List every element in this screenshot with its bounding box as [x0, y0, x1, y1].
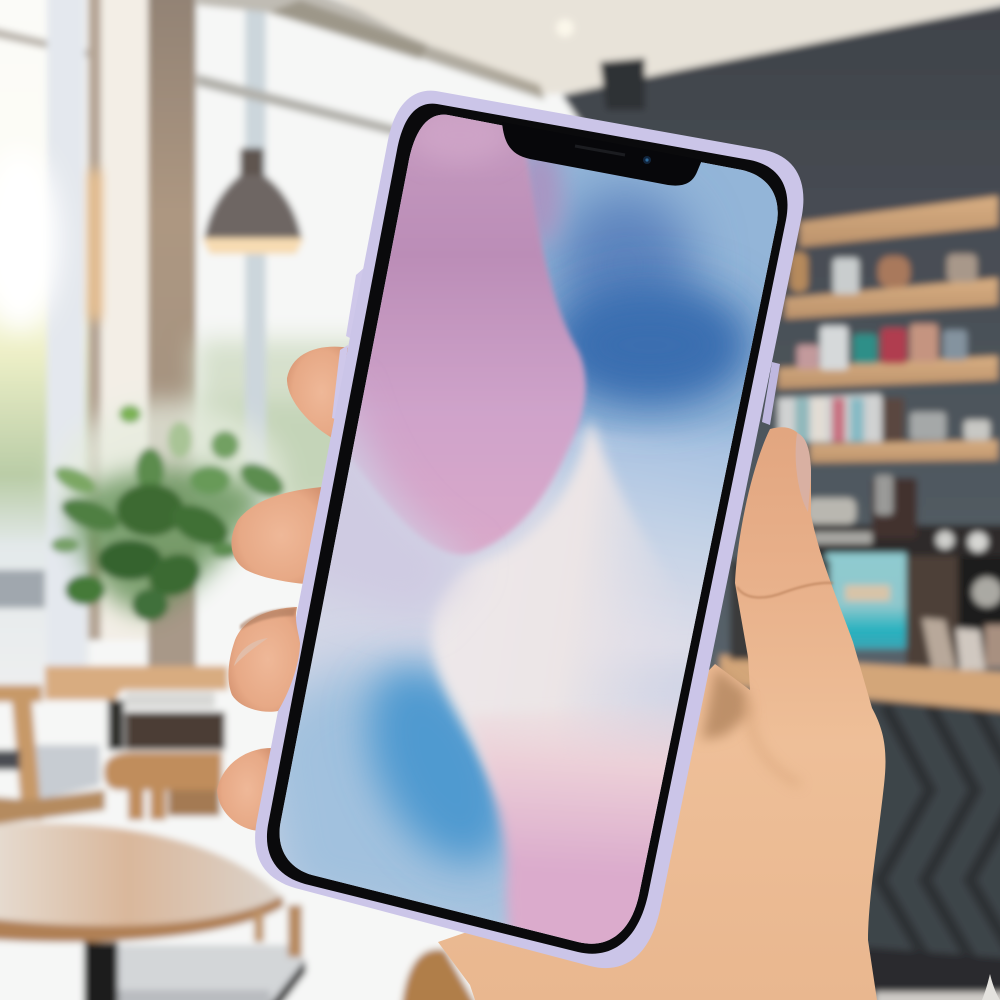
nail highlight — [234, 638, 268, 666]
pendant lamp — [202, 148, 304, 254]
car in window — [0, 570, 45, 608]
ceiling — [265, 0, 1000, 95]
cups — [922, 618, 956, 668]
speaker — [575, 146, 625, 155]
middle chair — [104, 752, 222, 820]
thumbnail — [796, 433, 811, 512]
deep blue area — [557, 190, 693, 340]
hand: palm and thumb — [438, 427, 886, 1000]
right window mullion — [245, 0, 266, 520]
right window green — [197, 340, 400, 520]
dark back wall — [562, 0, 1000, 1000]
front chair — [118, 905, 306, 1000]
screen wallpaper — [280, 114, 778, 944]
lower zigzag panel — [840, 700, 1000, 1000]
mid right fade — [552, 423, 736, 672]
black bezel — [267, 104, 788, 954]
finger top shadow — [240, 608, 296, 630]
middle finger — [231, 487, 322, 584]
lilac case — [255, 91, 803, 968]
left window frame — [0, 22, 90, 58]
upper left corner lighter pink — [412, 114, 502, 158]
mauve blend at notch — [527, 158, 570, 248]
thumb web shadow — [702, 668, 748, 740]
shelf items — [778, 252, 990, 442]
foliage mass — [70, 469, 265, 615]
poster — [826, 553, 906, 649]
notch — [502, 122, 702, 186]
little finger — [217, 748, 272, 831]
white column — [101, 0, 148, 640]
palm mound shadow — [749, 700, 800, 785]
index finger — [287, 347, 350, 438]
side buttons — [346, 268, 364, 340]
back table — [45, 666, 228, 750]
pink upper left shape — [345, 100, 586, 554]
phone — [250, 91, 810, 968]
ring finger over case — [228, 607, 300, 712]
camera lens — [643, 156, 651, 164]
wooden pillar — [148, 0, 196, 670]
left edge pink fade — [322, 410, 462, 608]
left chair — [0, 685, 105, 828]
espresso unit — [906, 556, 966, 666]
thumb joint crease — [737, 583, 833, 597]
cream center — [428, 418, 654, 795]
left window — [0, 0, 90, 700]
lower left blue — [250, 664, 560, 960]
round table — [0, 823, 285, 1000]
lower pink — [468, 708, 678, 944]
watermark sparkle — [982, 974, 1000, 1000]
wooden shelves — [800, 196, 998, 247]
sun glow — [0, 150, 60, 330]
plant — [0, 400, 289, 670]
floor and stool — [400, 949, 490, 1000]
upper right pale blue — [526, 158, 778, 465]
coffee machine — [730, 475, 1000, 670]
